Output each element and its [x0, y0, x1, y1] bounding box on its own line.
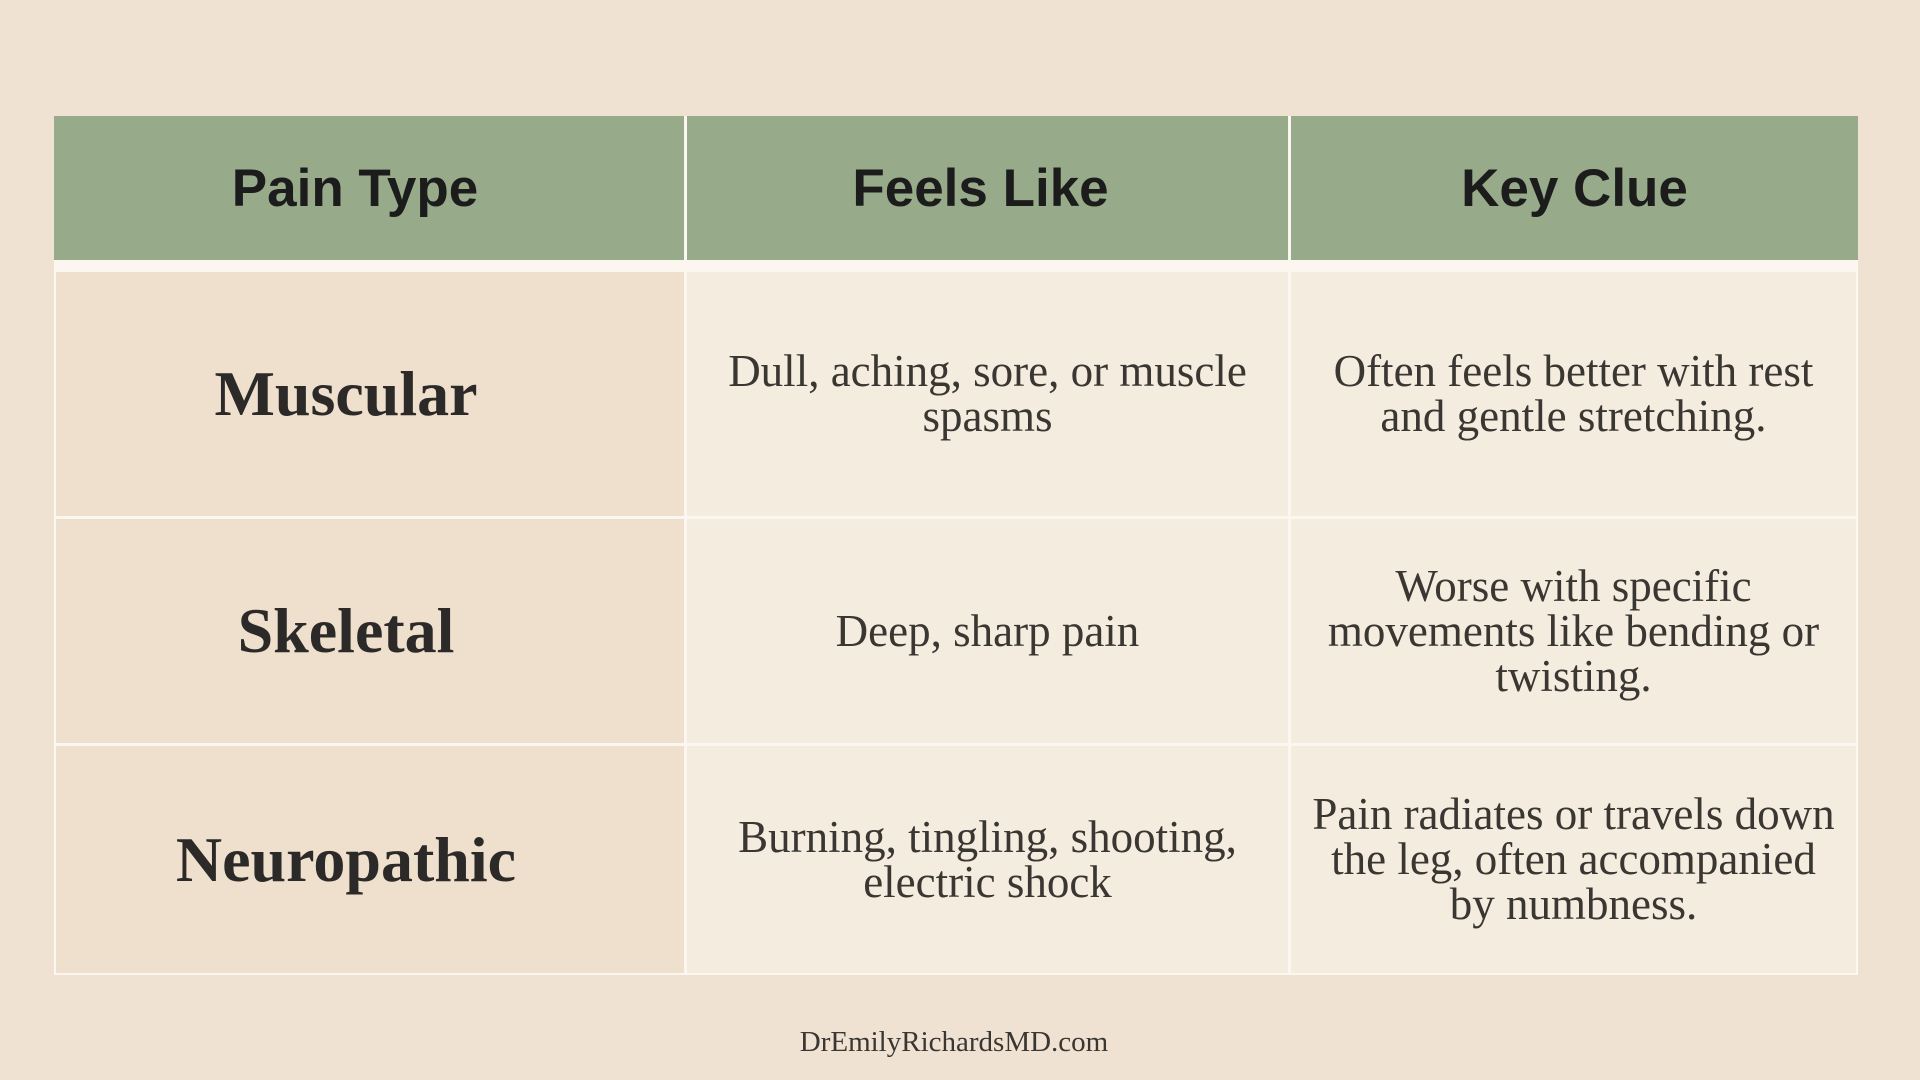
cell: skeletal feels like: Deep, sharp pain — [836, 606, 1139, 656]
cell: muscular key clue: Often feels better with rest and gentle stretching. — [1334, 346, 1813, 441]
header: Key Clue: Key Clue — [1461, 158, 1688, 218]
cell: skeletal key clue — [1291, 519, 1856, 743]
row label: Neuropathic: Neuropathic — [176, 824, 516, 894]
cell: muscular feels like — [687, 272, 1288, 516]
cell: neuropathic key clue — [1291, 746, 1856, 973]
table — [54, 116, 1858, 975]
cell: muscular key clue — [1291, 272, 1856, 516]
row label: Muscular: Muscular — [214, 358, 478, 429]
header: Key Clue — [1291, 116, 1858, 260]
cell: skeletal feels like — [687, 519, 1288, 743]
footer: DrEmilyRichardsMD.com — [800, 1026, 1108, 1058]
cell: skeletal key clue: Worse with specific movements like bending or twisting. — [1328, 560, 1819, 700]
header: Feels Like: Feels Like — [852, 158, 1109, 218]
cell: neuropathic feels like: Burning, tingling, shooting, electric shock — [738, 812, 1237, 906]
row label: Neuropathic — [56, 746, 684, 973]
row label: Muscular — [56, 272, 684, 516]
cell: neuropathic key clue: Pain radiates or travels down the leg, often accompanied — [1312, 789, 1835, 884]
cell: muscular feels like: Dull, aching, sore, or muscle spasms — [728, 346, 1247, 441]
row label: Skeletal: Skeletal — [238, 595, 454, 666]
header: Feels Like — [687, 116, 1288, 260]
cell: neuropathic feels like — [687, 746, 1288, 973]
header: Pain Type: Pain Type — [232, 158, 478, 218]
row label: Skeletal — [56, 519, 684, 743]
header: Pain Type — [54, 116, 684, 260]
cell: neuropathic key clue: by numbness. — [1450, 879, 1697, 929]
